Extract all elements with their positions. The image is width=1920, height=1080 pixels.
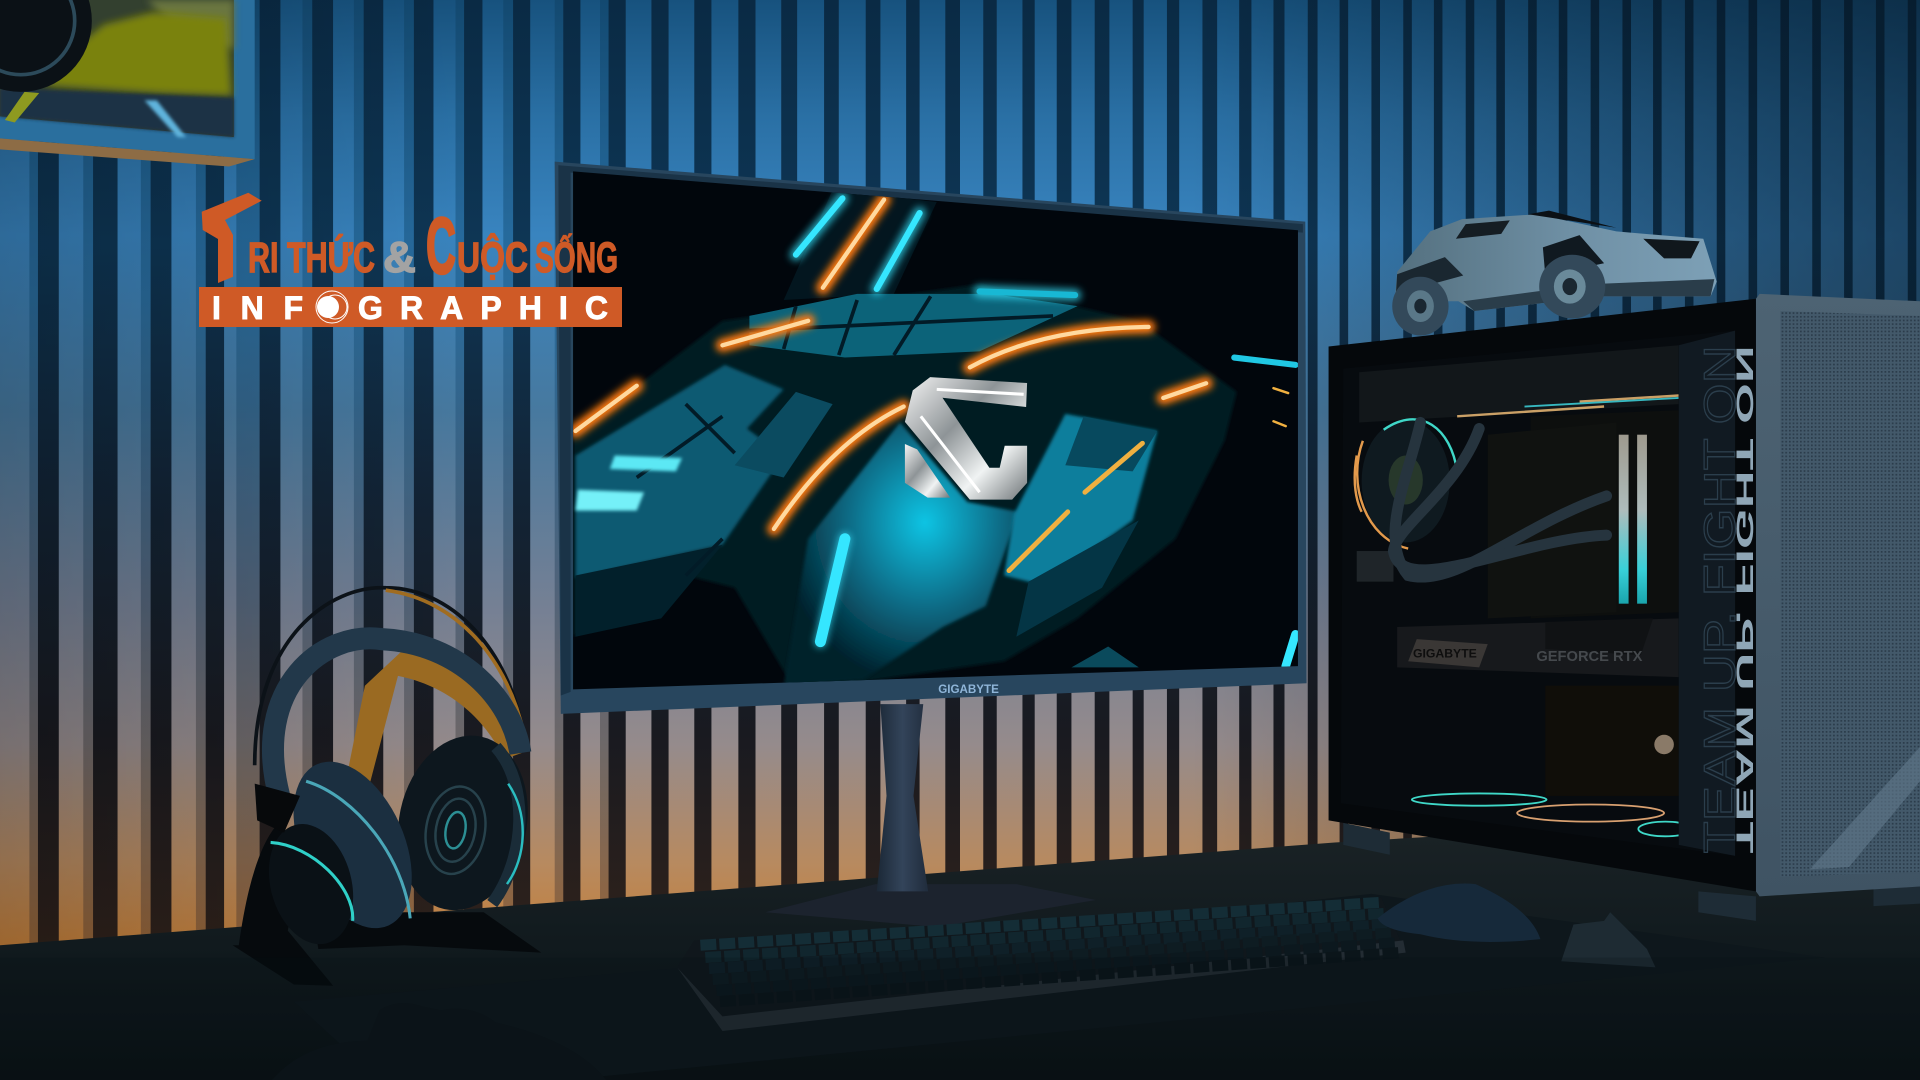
logo wordmark: & xyxy=(383,233,416,282)
case feet xyxy=(1343,823,1920,921)
keycaps xyxy=(700,902,1398,1002)
RAM sticks xyxy=(1619,435,1647,604)
screen glow lines: cyan xyxy=(796,198,1296,666)
logo wordmark: SỐNG xyxy=(535,233,618,282)
logo banner xyxy=(199,287,622,327)
bottom fans xyxy=(1412,793,1692,836)
motherboard lower xyxy=(1545,686,1680,796)
headphone speaker grille xyxy=(419,782,492,879)
desk surface xyxy=(0,808,1920,1080)
monitor screen artwork xyxy=(573,190,1296,692)
case interior xyxy=(1355,345,1692,836)
monitor brand text: GIGABYTE xyxy=(938,683,999,696)
mirrored frame lettering: TEAM UP. FIGHT ON xyxy=(1730,345,1757,853)
monitor emblem xyxy=(905,377,1027,500)
framed picture on the wall xyxy=(0,0,255,167)
logo wordmark: C xyxy=(426,201,456,290)
GPU: GIGABYTE xyxy=(1413,647,1477,661)
logo wordmark: UỘC xyxy=(457,233,528,282)
car wheels xyxy=(1392,255,1605,336)
monitor xyxy=(555,162,1307,714)
PC case xyxy=(1329,294,1920,921)
screen glow lines: orange xyxy=(576,200,1288,571)
keyboard xyxy=(677,898,1406,1031)
screen cyan panels xyxy=(610,456,682,471)
GPU xyxy=(1397,618,1679,677)
coolant tubes xyxy=(1393,422,1607,577)
headphones on stand xyxy=(233,588,543,986)
banner lettering: INF xyxy=(212,290,303,326)
logo wordmark xyxy=(248,201,618,290)
mat logo xyxy=(1561,912,1656,967)
mouse xyxy=(1378,884,1540,942)
case front frame xyxy=(1329,299,1756,891)
banner lettering xyxy=(212,290,608,326)
logo big T xyxy=(202,193,262,283)
banner O icon xyxy=(316,291,348,323)
banner lettering: GRAPHIC xyxy=(358,290,608,326)
model car on the case xyxy=(1392,211,1717,336)
monitor stand xyxy=(765,704,1096,927)
case side panel xyxy=(1756,294,1920,896)
desk mat xyxy=(294,894,1824,1080)
logo: Tri thuc & Cuoc song Infographic xyxy=(199,193,622,327)
bottom vignette xyxy=(0,958,1920,1080)
pillar lettering: TEAM UP. FIGHT ON xyxy=(1696,345,1745,853)
GPU: GEFORCE RTX xyxy=(1536,649,1643,665)
logo wordmark: RI THỨC xyxy=(248,233,375,282)
CPU fan xyxy=(1355,419,1457,582)
game controller xyxy=(272,1003,606,1080)
case pillar xyxy=(1679,331,1735,856)
